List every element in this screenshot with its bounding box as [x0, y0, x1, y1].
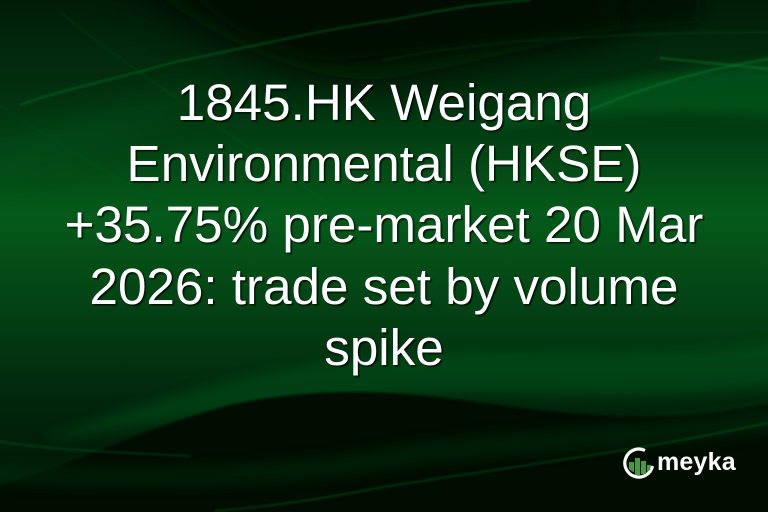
- title: 2026: trade set by volume: [89, 258, 678, 315]
- bottom mid glow band: [40, 335, 768, 440]
- title: Environmental (HKSE): [127, 135, 641, 192]
- bottom dark swoosh: [0, 392, 768, 512]
- top dark swoosh: [90, 0, 620, 80]
- title: spike: [324, 319, 444, 376]
- wordmark: meyka: [657, 448, 736, 476]
- title: +35.75% pre-market 20 Mar: [65, 196, 703, 253]
- icon: circular arrow with bars: [623, 447, 654, 479]
- title: 1845.HK Weigang: [177, 74, 591, 131]
- right mid glow band: [500, 60, 768, 128]
- title: [65, 74, 705, 378]
- logo: meyka: [623, 447, 736, 479]
